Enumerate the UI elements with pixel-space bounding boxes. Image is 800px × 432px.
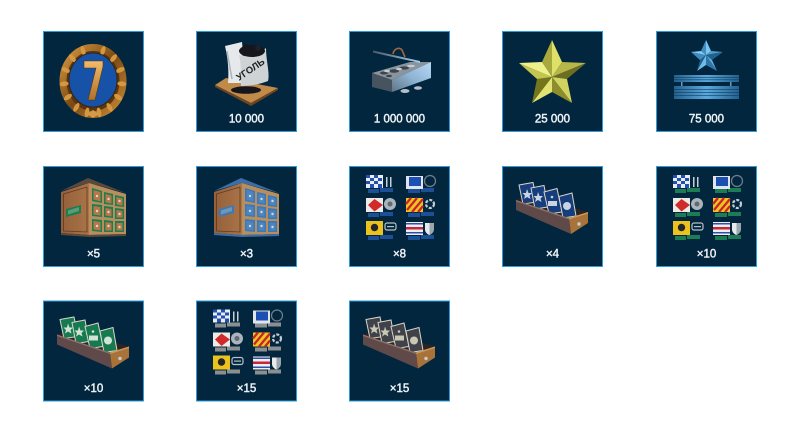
icon: six signal flags, grey [213, 310, 282, 374]
label: 10 000: 10 000 [229, 114, 264, 126]
icon: tray of green cards [57, 317, 129, 368]
card: green crate ×5 [44, 166, 144, 266]
label: ×5: ×5 [87, 248, 100, 260]
icon: six signal flags, blue [366, 175, 436, 240]
icon: blue crate [214, 178, 279, 237]
card: signal flags ×10 [656, 166, 756, 266]
label: ×10: ×10 [697, 248, 716, 260]
icon: six signal flags, green [673, 175, 742, 240]
card: blue star 75 000 [656, 32, 756, 132]
card: blue crate ×3 [196, 166, 296, 266]
card: medal with number 7 [44, 32, 144, 132]
card: signal flags ×15 [196, 301, 296, 401]
icon: blue star above bars [674, 40, 739, 99]
label: ×4: ×4 [546, 248, 560, 260]
label: ×8: ×8 [393, 248, 406, 260]
label: ×3: ×3 [240, 248, 253, 260]
label: 75 000: 75 000 [689, 114, 724, 126]
icon: tray of grey cards [363, 317, 435, 368]
icon: gold star [519, 40, 586, 103]
card: credits 1 000 000 [350, 32, 450, 132]
label: 1 000 000: 1 000 000 [374, 114, 425, 126]
label: 25 000: 25 000 [535, 114, 570, 126]
card: blue cards tray ×4 [502, 166, 602, 266]
label: ×10: ×10 [84, 383, 103, 395]
icon: open silver box with coins [372, 48, 431, 93]
card: grey cards tray ×15 [350, 301, 450, 401]
label: ×15: ×15 [390, 383, 409, 395]
icon: coal sacks on pallet: УГОЛЬ [235, 56, 267, 83]
icon: laurel wreath medal [59, 45, 127, 118]
card: gold star 25 000 [502, 32, 602, 132]
card: green cards tray ×10 [44, 301, 144, 401]
label: ×15: ×15 [237, 383, 256, 395]
card: signal flags ×8 [350, 166, 450, 266]
card: coal 10 000 [196, 32, 296, 132]
icon: green crate [61, 178, 126, 237]
icon: tray of blue cards [516, 182, 588, 234]
